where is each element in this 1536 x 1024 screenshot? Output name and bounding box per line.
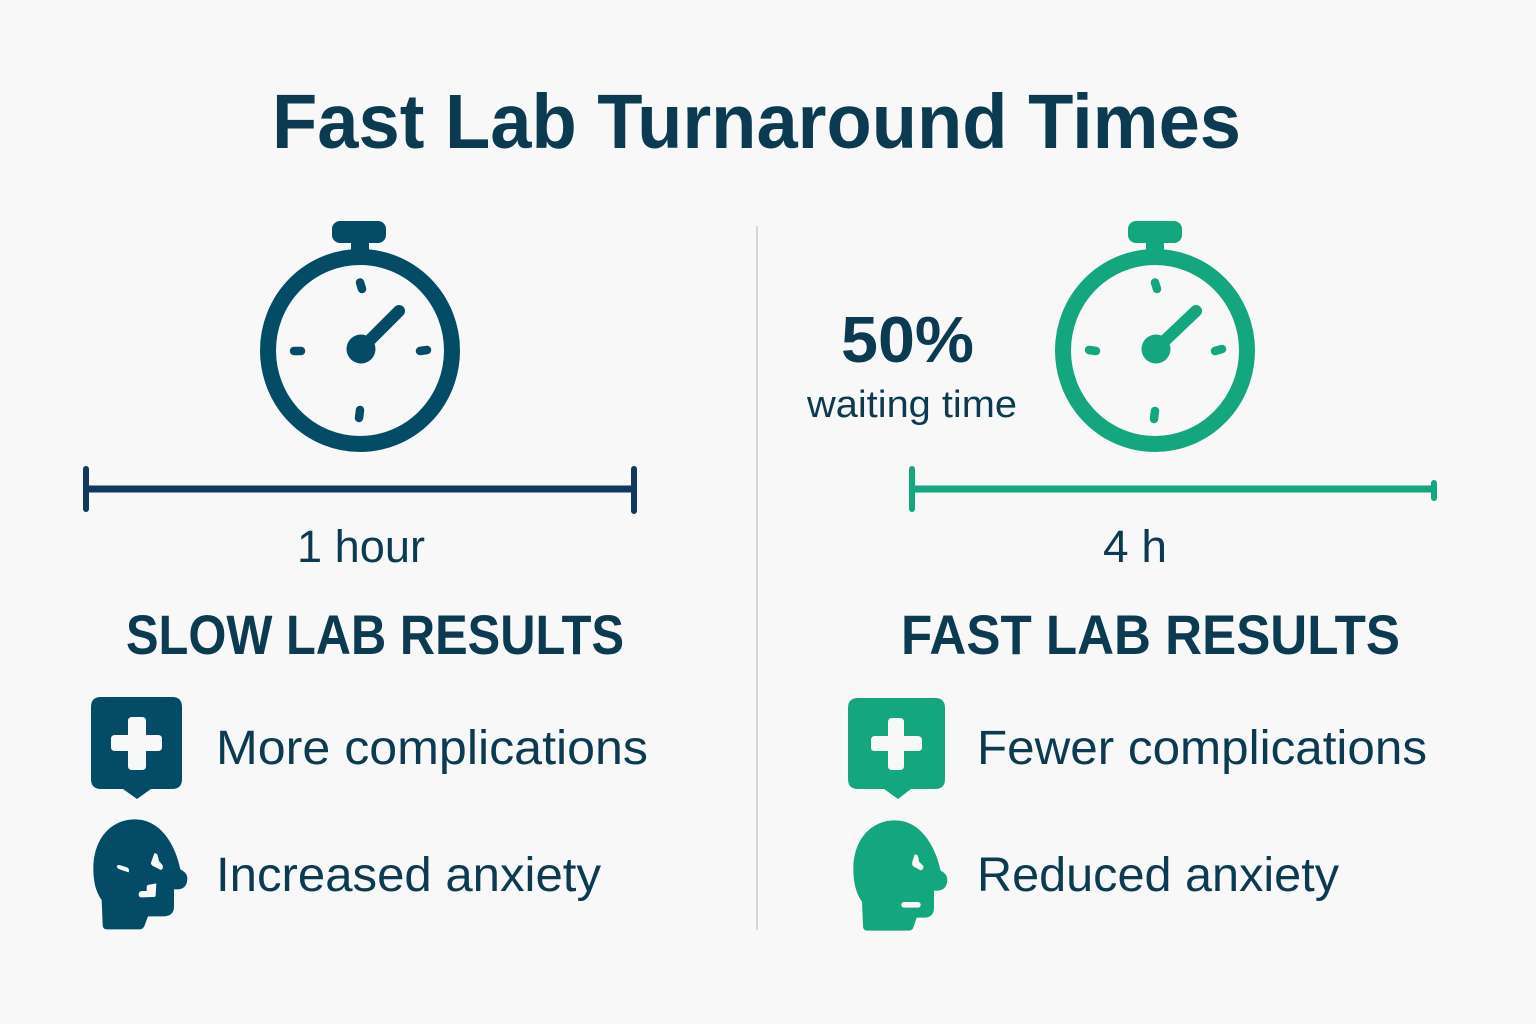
text: fewer complications: Fewer complications	[977, 722, 1427, 775]
icon: calm head	[853, 820, 947, 931]
heading: fast lab results: FAST LAB RESULTS	[901, 603, 1400, 666]
text: reduced anxiety: Reduced anxiety	[977, 849, 1339, 902]
icon: anxious head	[93, 819, 187, 929]
text: more complications: More complications	[216, 722, 648, 775]
heading: slow lab results: SLOW LAB RESULTS	[126, 603, 624, 666]
icon: slow stopwatch	[268, 221, 452, 444]
stat: 50% waiting time: 50%	[841, 303, 974, 376]
panel: fast lab results	[806, 221, 1434, 931]
icon: medical cross bubble	[848, 698, 945, 799]
label: 4 h: 4 h	[1103, 521, 1167, 572]
stat: 50% waiting time: waiting time	[806, 384, 1017, 426]
title: Fast Lab Turnaround Times	[272, 79, 1241, 165]
stat: 50% waiting time	[806, 303, 1017, 426]
icon: fast stopwatch	[1063, 221, 1247, 444]
timeline: 1 hour	[86, 469, 634, 511]
timeline: 4 h	[912, 469, 1434, 509]
icon: medical cross bubble	[91, 697, 182, 799]
label: 1 hour: 1 hour	[297, 521, 425, 572]
text: increased anxiety: Increased anxiety	[216, 849, 601, 902]
panel: slow lab results	[86, 221, 648, 929]
